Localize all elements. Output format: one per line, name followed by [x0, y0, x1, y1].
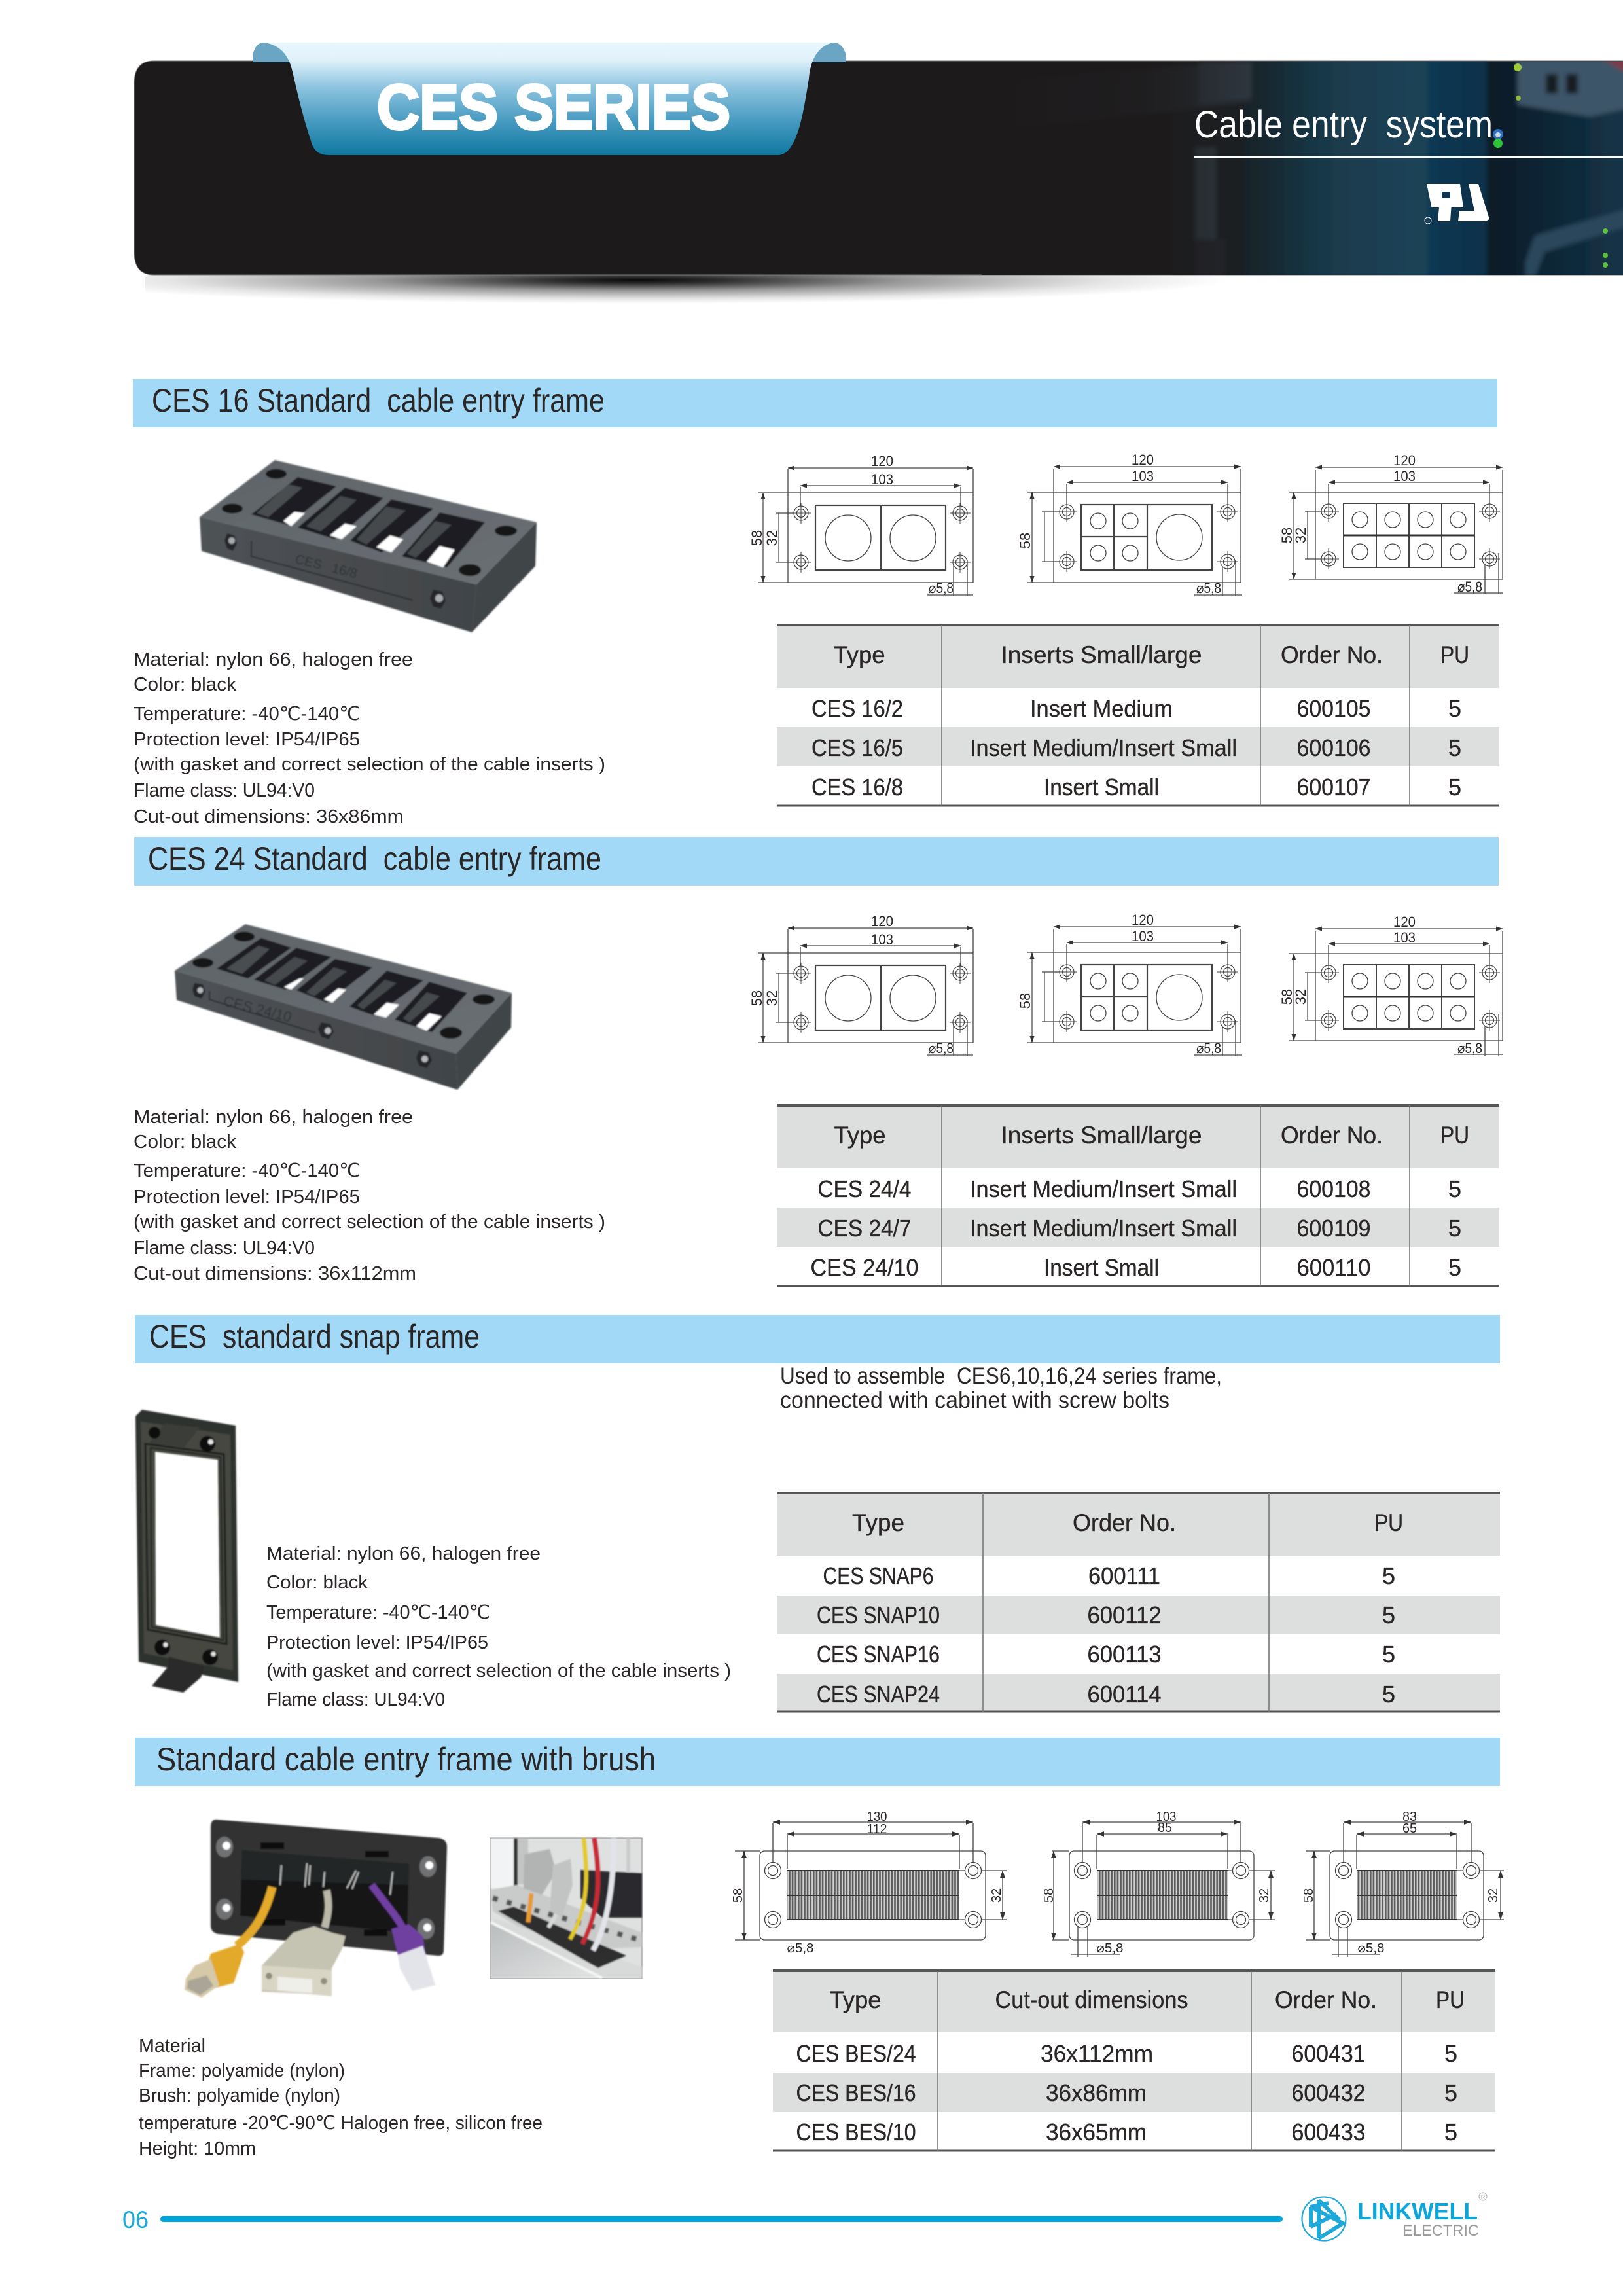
spec text: brush frame [139, 2036, 543, 2159]
table: brush frame: 36x112mm [1041, 2040, 1153, 2067]
spec text: CES 16: (with gasket and correct selection of the cable inserts ) [134, 754, 605, 775]
table: CES 24: CES 24/4 [818, 1175, 911, 1202]
description: snap frame: Used to assemble CES6,10,16,24 series frame, [780, 1363, 1222, 1389]
header banner [49, 43, 1623, 304]
diagram: CES 24/4: 58 [749, 990, 765, 1006]
table: CES 24: Insert Medium/Insert Small [970, 1215, 1237, 1242]
table: CES 16: 5 [1448, 774, 1461, 800]
diagram: CES 24/7: ⌀5,8 [1196, 1040, 1221, 1056]
diagram: CES BES/16: 85 [1158, 1821, 1172, 1835]
spec text: CES 16: Temperature: -40℃-140℃ [134, 704, 361, 725]
header dark band [134, 61, 1623, 275]
table: CES 24: 600110 [1297, 1254, 1370, 1281]
diagram: CES 16/2: 103 [871, 471, 893, 488]
table: CES 24: 5 [1448, 1254, 1461, 1281]
ribbon [264, 43, 833, 155]
spec text: brush frame: Height: 10mm [139, 2138, 256, 2159]
table: brush frame: 36x65mm [1046, 2119, 1147, 2145]
diagram: CES 16/2 [749, 453, 973, 596]
table: brush frame: 5 [1444, 2119, 1457, 2145]
table: CES 24: Insert Medium/Insert Small [970, 1175, 1237, 1202]
diagram: CES 24/4 [749, 913, 973, 1056]
table: brush frame [773, 1971, 1495, 2151]
diagram: CES 16/2: ⌀5,8 [929, 580, 954, 596]
table: snap frame [777, 1493, 1500, 1712]
table: CES 24 [777, 1105, 1499, 1286]
spec text: CES 24: Material: nylon 66, halogen free [134, 1107, 413, 1128]
spec text: snap frame: Protection level: IP54/IP65 [266, 1632, 488, 1653]
diagram: CES 24/7: 103 [1132, 928, 1154, 944]
table: snap frame: 5 [1382, 1602, 1395, 1628]
spec text: CES 16: Flame class: UL94:V0 [134, 780, 315, 801]
table: snap frame: PU [1374, 1509, 1403, 1536]
table: CES 16: Insert Small [1044, 774, 1159, 800]
table: brush frame: Type [830, 1986, 881, 2013]
section bar: snap frame [135, 1315, 1500, 1363]
diagram: CES 16/5: 120 [1132, 452, 1154, 468]
table: snap frame: 600113 [1088, 1641, 1161, 1668]
spec text: snap frame: Temperature: -40℃-140℃ [266, 1602, 490, 1623]
table: brush frame: 5 [1444, 2079, 1457, 2106]
diagram: CES 16/5: ⌀5,8 [1196, 580, 1221, 596]
table: CES 24: Order No. [1281, 1122, 1383, 1149]
table: snap frame: CES SNAP10 [817, 1602, 940, 1628]
logo: Linkwell Electric: LINKWELL [1357, 2198, 1478, 2225]
spec text: CES 16: Color: black [134, 674, 237, 695]
table: CES 16: 5 [1448, 734, 1461, 761]
spec text: CES 16: Protection level: IP54/IP65 [134, 729, 360, 750]
diagram: CES 16/8: 58 [1279, 528, 1295, 543]
diagram: CES 16/8: 103 [1393, 468, 1416, 484]
table: snap frame: CES SNAP16 [817, 1641, 940, 1668]
table: CES 16 [777, 625, 1499, 806]
table: CES 16: Type [834, 641, 885, 668]
logo: Linkwell Electric: ELECTRIC [1402, 2222, 1479, 2240]
table: CES 16: PU [1440, 641, 1469, 668]
photo: CES 24 frame: CES 24/10 [222, 993, 293, 1026]
spec text: snap frame: Material: nylon 66, halogen free [266, 1543, 541, 1564]
table: snap frame: CES SNAP24 [817, 1681, 940, 1708]
diagram: CES BES/24: ⌀5,8 [787, 1941, 814, 1956]
diagram: CES BES/16: 32 [1257, 1888, 1272, 1903]
diagram: CES BES/24: 130 [866, 1810, 887, 1824]
diagram: CES 16/5: 103 [1132, 468, 1154, 484]
table: CES 24: 600109 [1297, 1215, 1370, 1242]
table: snap frame: 600114 [1088, 1681, 1161, 1708]
logo: Linkwell Electric: R [1481, 2194, 1486, 2200]
logo: Linkwell Electric [1302, 2193, 1487, 2241]
table: snap frame: 5 [1382, 1641, 1395, 1668]
subtitle: Cable entry system [1194, 103, 1493, 146]
photo: brush frame with cables [185, 1820, 447, 1998]
diagram: CES BES/16 [1042, 1810, 1275, 1957]
diagram: CES 24/10: ⌀5,8 [1457, 1040, 1482, 1056]
diagram: CES 24/10: 103 [1393, 929, 1416, 946]
diagram: CES 16/8: ⌀5,8 [1457, 579, 1482, 595]
table: CES 16: CES 16/2 [812, 695, 903, 722]
diagram: CES BES/16: 103 [1156, 1810, 1177, 1824]
section bar: CES 24: CES 24 Standard cable entry frame [148, 840, 601, 877]
diagram: CES BES/24: 112 [866, 1822, 887, 1837]
diagram: CES 16/8 [1279, 452, 1503, 595]
table: CES 24: 5 [1448, 1215, 1461, 1242]
photo: snap frame [135, 1410, 238, 1693]
diagram: CES 24/7: 58 [1017, 993, 1033, 1009]
footer line [160, 2216, 1283, 2222]
diagram: CES BES/10: ⌀5,8 [1357, 1941, 1385, 1956]
table: snap frame: 5 [1382, 1562, 1395, 1589]
table: CES 24: CES 24/7 [818, 1215, 911, 1242]
ribbon tabs [253, 43, 846, 62]
diagram: CES 16/8: 32 [1293, 528, 1309, 543]
section bar: snap frame: CES standard snap frame [149, 1318, 480, 1355]
spec text: snap frame: Color: black [266, 1572, 368, 1593]
table: CES 24: Type [834, 1122, 886, 1149]
spec text: snap frame: (with gasket and correct selection of the cable inserts ) [266, 1660, 731, 1681]
diagram: CES BES/16: ⌀5,8 [1097, 1941, 1123, 1956]
diagram: CES 16/2: 120 [871, 453, 893, 469]
diagram: CES 16/5: 58 [1017, 533, 1033, 548]
spec text: brush frame: temperature -20℃-90℃ Halogen free, silicon free [139, 2113, 543, 2134]
table: CES 16: Insert Medium/Insert Small [970, 734, 1237, 761]
diagram: CES 24/7: 120 [1132, 912, 1154, 928]
spec text: CES 16: Cut-out dimensions: 36x86mm [134, 806, 404, 827]
photo: CES 16 frame: CES 16/8 [294, 552, 359, 581]
section bar: brush frame: Standard cable entry frame with brush [156, 1741, 656, 1778]
spec text: CES 24: Color: black [134, 1132, 237, 1153]
diagram: CES 24/7 [1017, 912, 1242, 1056]
table: CES 24: Insert Small [1044, 1254, 1159, 1281]
spec text: brush frame: Brush: polyamide (nylon) [139, 2085, 340, 2106]
table: CES 24: 600108 [1297, 1175, 1370, 1202]
diagram: CES BES/24: 32 [990, 1888, 1004, 1903]
table: snap frame: Type [852, 1509, 904, 1536]
diagram: CES BES/16: 58 [1042, 1888, 1056, 1903]
table: CES 16: CES 16/8 [812, 774, 903, 800]
diagram: CES 24/4: ⌀5,8 [929, 1040, 954, 1056]
diagram: CES 24/4: 103 [871, 931, 893, 948]
diagram: CES 16/2: 32 [764, 530, 780, 546]
diagram: CES BES/10: 83 [1402, 1810, 1417, 1824]
diagram: CES 24/10 [1279, 914, 1503, 1056]
section bar: CES 16: CES 16 Standard cable entry frame [152, 382, 605, 419]
table: snap frame: CES SNAP6 [823, 1562, 933, 1589]
table: snap frame: 600112 [1088, 1602, 1161, 1628]
table: snap frame: 5 [1382, 1681, 1395, 1708]
section bar: CES 16 [133, 379, 1497, 427]
diagram: CES 24/10: 120 [1393, 914, 1416, 930]
table: snap frame: Order No. [1073, 1509, 1176, 1536]
diagram: CES BES/24: 58 [731, 1888, 745, 1903]
spec text: CES 24: Protection level: IP54/IP65 [134, 1187, 360, 1208]
section bar: CES 24 [134, 837, 1499, 886]
diagram: CES 24/4: 32 [764, 990, 780, 1006]
table: CES 16: Inserts Small/large [1001, 641, 1202, 668]
diagram: CES BES/10: 32 [1486, 1888, 1501, 1903]
photo: CES 16 frame [200, 460, 537, 632]
spec text: brush frame: Frame: polyamide (nylon) [139, 2060, 345, 2081]
table: brush frame: CES BES/10 [796, 2119, 916, 2145]
spec text: CES 16 [134, 649, 605, 827]
diagram: CES 16/5 [1017, 452, 1242, 596]
table: CES 16: CES 16/5 [812, 734, 903, 761]
table: brush frame: 5 [1444, 2040, 1457, 2067]
spec text: CES 24: Flame class: UL94:V0 [134, 1238, 315, 1259]
table: CES 24: PU [1440, 1122, 1469, 1149]
diagram: CES BES/10: 65 [1402, 1821, 1417, 1836]
diagram: CES 24/10: 32 [1293, 989, 1309, 1005]
page number: 06 [122, 2206, 149, 2233]
section bar: brush frame [135, 1738, 1500, 1786]
table: brush frame: PU [1436, 1986, 1465, 2013]
spec text: snap frame [266, 1543, 731, 1710]
spec text: brush frame: Material [139, 2036, 205, 2056]
table: brush frame: 600432 [1292, 2079, 1365, 2106]
spec text: CES 24: (with gasket and correct selection of the cable inserts ) [134, 1211, 605, 1232]
table: brush frame: 600433 [1292, 2119, 1365, 2145]
table: CES 16: Order No. [1281, 641, 1383, 668]
table: CES 16: Insert Medium [1030, 695, 1173, 722]
table: CES 16: 600105 [1297, 695, 1370, 722]
description: snap frame: connected with cabinet with screw bolts [780, 1388, 1169, 1413]
header server photo [982, 55, 1623, 281]
table: CES 16: 600107 [1297, 774, 1370, 800]
icon: UL mark [1425, 184, 1489, 224]
diagram: CES 16/8: 120 [1393, 452, 1416, 469]
spec text: snap frame: Flame class: UL94:V0 [266, 1689, 445, 1710]
table: brush frame: Order No. [1275, 1986, 1377, 2013]
spec text: CES 24: Cut-out dimensions: 36x112mm [134, 1263, 416, 1284]
spec text: CES 24 [134, 1107, 605, 1284]
diagram: CES BES/24 [731, 1810, 1007, 1956]
spec text: CES 24: Temperature: -40℃-140℃ [134, 1160, 361, 1181]
table: CES 24: Inserts Small/large [1001, 1122, 1202, 1149]
photo: CES 24 frame [175, 924, 512, 1090]
table: brush frame: 600431 [1292, 2040, 1365, 2067]
table: CES 24: 5 [1448, 1175, 1461, 1202]
header shadow [145, 275, 1188, 302]
spec text: CES 16: Material: nylon 66, halogen free [134, 649, 413, 670]
diagram: CES 24/4: 120 [871, 913, 893, 929]
diagram: CES BES/10 [1302, 1810, 1504, 1957]
table: brush frame: CES BES/24 [796, 2040, 916, 2067]
table: CES 16: 5 [1448, 695, 1461, 722]
table: brush frame: CES BES/16 [796, 2079, 916, 2106]
title: CES SERIES [377, 71, 730, 143]
table: CES 24: CES 24/10 [810, 1254, 919, 1281]
diagram: CES 24/10: 58 [1279, 989, 1295, 1005]
table: CES 16: 600106 [1297, 734, 1370, 761]
table: snap frame: 600111 [1088, 1562, 1160, 1589]
table: brush frame: 36x86mm [1046, 2079, 1147, 2106]
table: brush frame: Cut-out dimensions [995, 1986, 1188, 2013]
diagram: CES 16/2: 58 [749, 530, 765, 546]
description: snap frame [780, 1363, 1222, 1413]
diagram: CES BES/10: 58 [1302, 1888, 1316, 1903]
photo: installed brush frame [490, 1838, 642, 1979]
